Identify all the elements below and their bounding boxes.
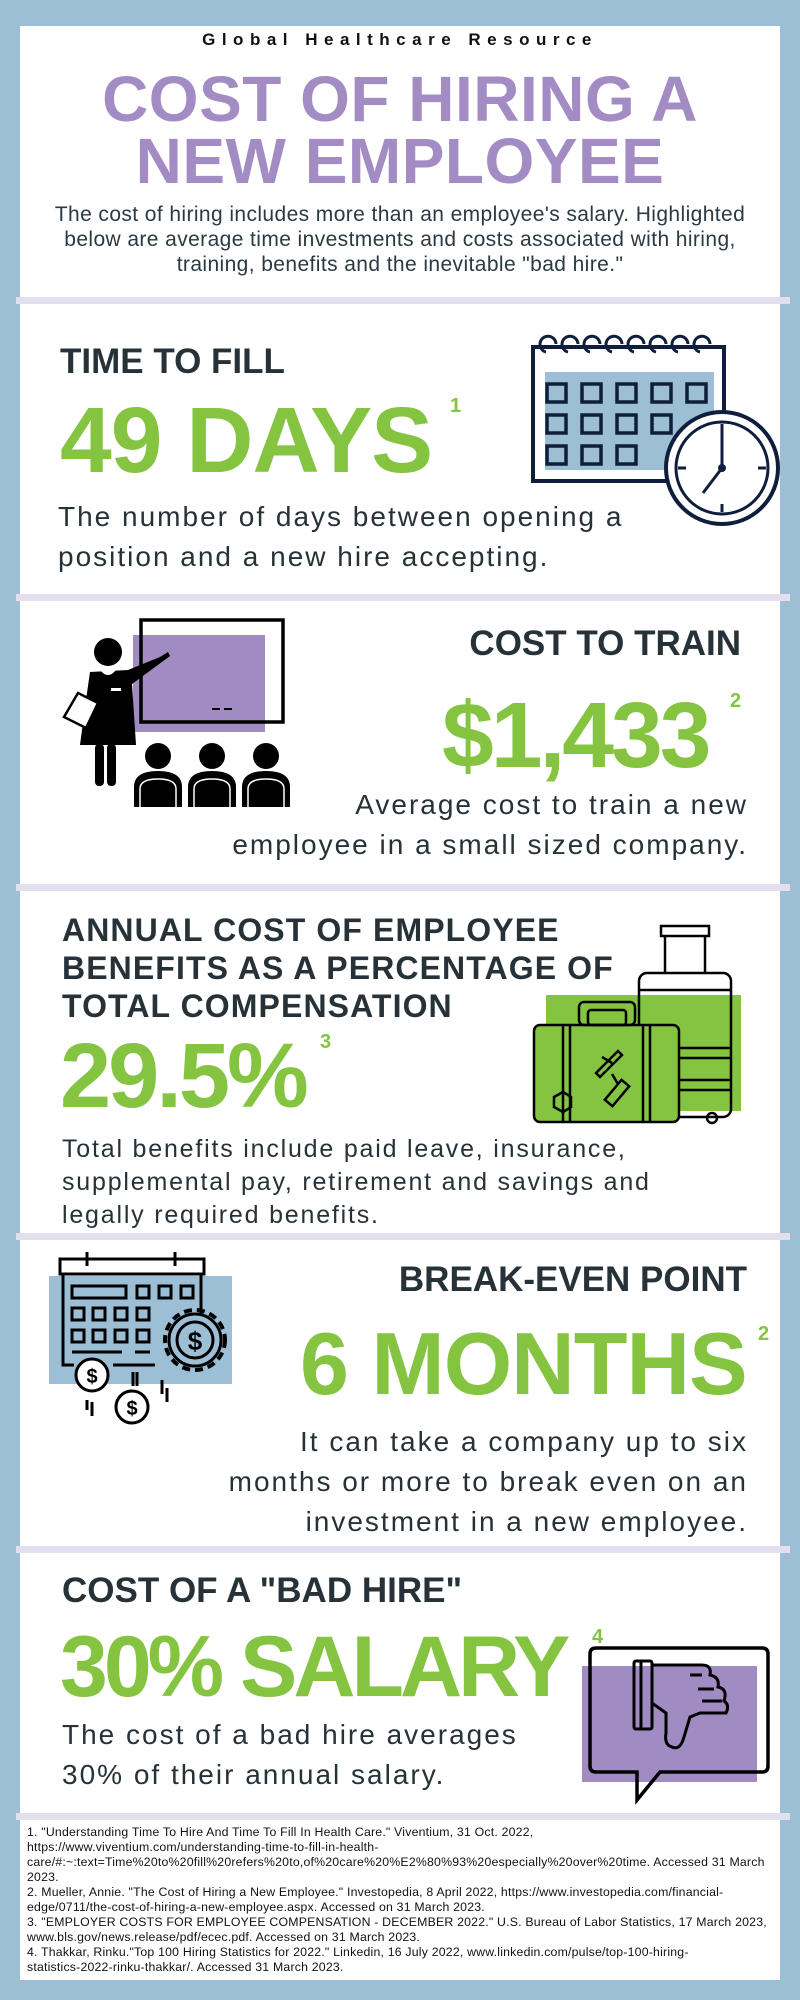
footnotes <box>27 1825 767 1974</box>
brand name: Global Healthcare Resource <box>202 30 598 49</box>
title: COST OF HIRING A <box>102 63 698 135</box>
description: benefits: supplemental pay, retirement and savings and <box>62 1168 651 1196</box>
section: cost to train <box>232 624 748 860</box>
heading: break-even point: BREAK-EVEN POINT <box>399 1260 747 1299</box>
icon: calendar with gear and coins <box>49 1252 232 1424</box>
footnotes: https://www.viventium.com/understanding-time-to-fill-in-health- <box>27 1840 379 1854</box>
heading: benefits: ANNUAL COST OF EMPLOYEE <box>62 912 560 948</box>
footnotes: 1. "Understanding Time To Hire And Time To Fill In Health Care." Viventium, 31 Oct. 2022, <box>27 1825 533 1839</box>
footnotes: care/#:~:text=Time%20to%20fill%20refers%20to,of%20care%20%E2%80%93%20especially%20over%20time. Accessed 31 March <box>27 1855 765 1869</box>
stat: 29.5%: 29.5% <box>60 1025 306 1127</box>
superscript 2: 2 <box>730 690 741 712</box>
stat: 6 months: 6 MONTHS <box>300 1314 747 1413</box>
description: cost to train: Average cost to train a new <box>355 789 748 820</box>
description: benefits: legally required benefits. <box>62 1201 380 1229</box>
heading: cost to train: COST TO TRAIN <box>469 624 741 663</box>
description: bad hire: The cost of a bad hire averages <box>62 1719 518 1750</box>
description: bad hire: 30% of their annual salary. <box>62 1759 445 1790</box>
description: bad hire <box>62 1719 518 1790</box>
footnotes: edge/0711/the-cost-of-hiring-a-new-employee.aspx. Accessed on 31 March 2023. <box>27 1900 485 1914</box>
description: cost to train: employee in a small sized company. <box>232 829 748 860</box>
icon: calendar with clock <box>531 334 780 526</box>
description: time to fill: position and a new hire accepting. <box>58 541 549 572</box>
description: benefits <box>62 1135 651 1229</box>
icon: teacher with students <box>62 618 290 807</box>
heading: time to fill: TIME TO FILL <box>60 342 285 381</box>
icon: thumbs down speech bubble <box>582 1646 770 1805</box>
section: break-even <box>229 1260 769 1537</box>
stat: $1,433: $1,433 <box>442 683 708 787</box>
section: benefits <box>60 912 651 1229</box>
superscript 2: 2 <box>758 1323 769 1345</box>
description: benefits: Total benefits include paid leave, insurance, <box>62 1135 627 1163</box>
intro text: below are average time investments and costs associated with hiring, <box>64 228 736 251</box>
stat: 30% salary: 30% SALARY <box>60 1619 566 1715</box>
section: bad hire <box>60 1571 603 1790</box>
description: time to fill <box>58 501 623 572</box>
icon: calendar with gear and coins: $ <box>126 1398 138 1420</box>
footnotes: statistics-2022-rinku-thakkar/. Accessed 31 March 2023. <box>27 1960 344 1974</box>
footnotes: 3. "EMPLOYER COSTS FOR EMPLOYEE COMPENSATION - DECEMBER 2022." U.S. Bureau of Labor Statistics, 17 March 2023, <box>27 1915 767 1929</box>
icon: luggage <box>532 924 741 1124</box>
heading: benefits: TOTAL COMPENSATION <box>62 988 453 1024</box>
description: break-even: It can take a company up to six <box>300 1426 748 1457</box>
description: cost to train <box>232 789 748 860</box>
title <box>102 63 698 197</box>
superscript 1: 1 <box>450 395 461 417</box>
superscript 4: 4 <box>592 1626 603 1648</box>
title: NEW EMPLOYEE <box>136 125 664 197</box>
footnotes: www.bls.gov/news.release/pdf/ecec.pdf. Accessed on 31 March 2023. <box>27 1930 420 1944</box>
description: break-even: months or more to break even on an <box>229 1466 748 1497</box>
footnotes: 2023. <box>27 1870 59 1884</box>
intro text: training, benefits and the inevitable "bad hire." <box>177 253 623 276</box>
stat: 49 days: 49 DAYS <box>60 388 432 492</box>
icon: calendar with gear and coins: $ <box>86 1366 98 1388</box>
heading: benefits <box>62 912 614 1024</box>
icon: calendar with gear and coins: $ <box>188 1326 203 1356</box>
heading: bad hire: COST OF A "BAD HIRE" <box>62 1571 462 1610</box>
superscript 3: 3 <box>320 1031 331 1053</box>
footnotes: 4. Thakkar, Rinku."Top 100 Hiring Statistics for 2022." Linkedin, 16 July 2022, www.linkedin.com/pulse/top-100-hiring- <box>27 1945 689 1959</box>
footnotes: 2. Mueller, Annie. "The Cost of Hiring a New Employee." Investopedia, 8 April 2022, https://www.investopedia.com/financial- <box>27 1885 723 1899</box>
description: time to fill: The number of days between opening a <box>58 501 623 532</box>
intro text <box>55 203 745 276</box>
description: break-even: investment in a new employee. <box>306 1506 748 1537</box>
description: break-even <box>229 1426 748 1537</box>
heading: benefits: BENEFITS AS A PERCENTAGE OF <box>62 950 614 986</box>
intro text: The cost of hiring includes more than an employee's salary. Highlighted <box>55 203 745 226</box>
section: time to fill <box>58 342 623 572</box>
